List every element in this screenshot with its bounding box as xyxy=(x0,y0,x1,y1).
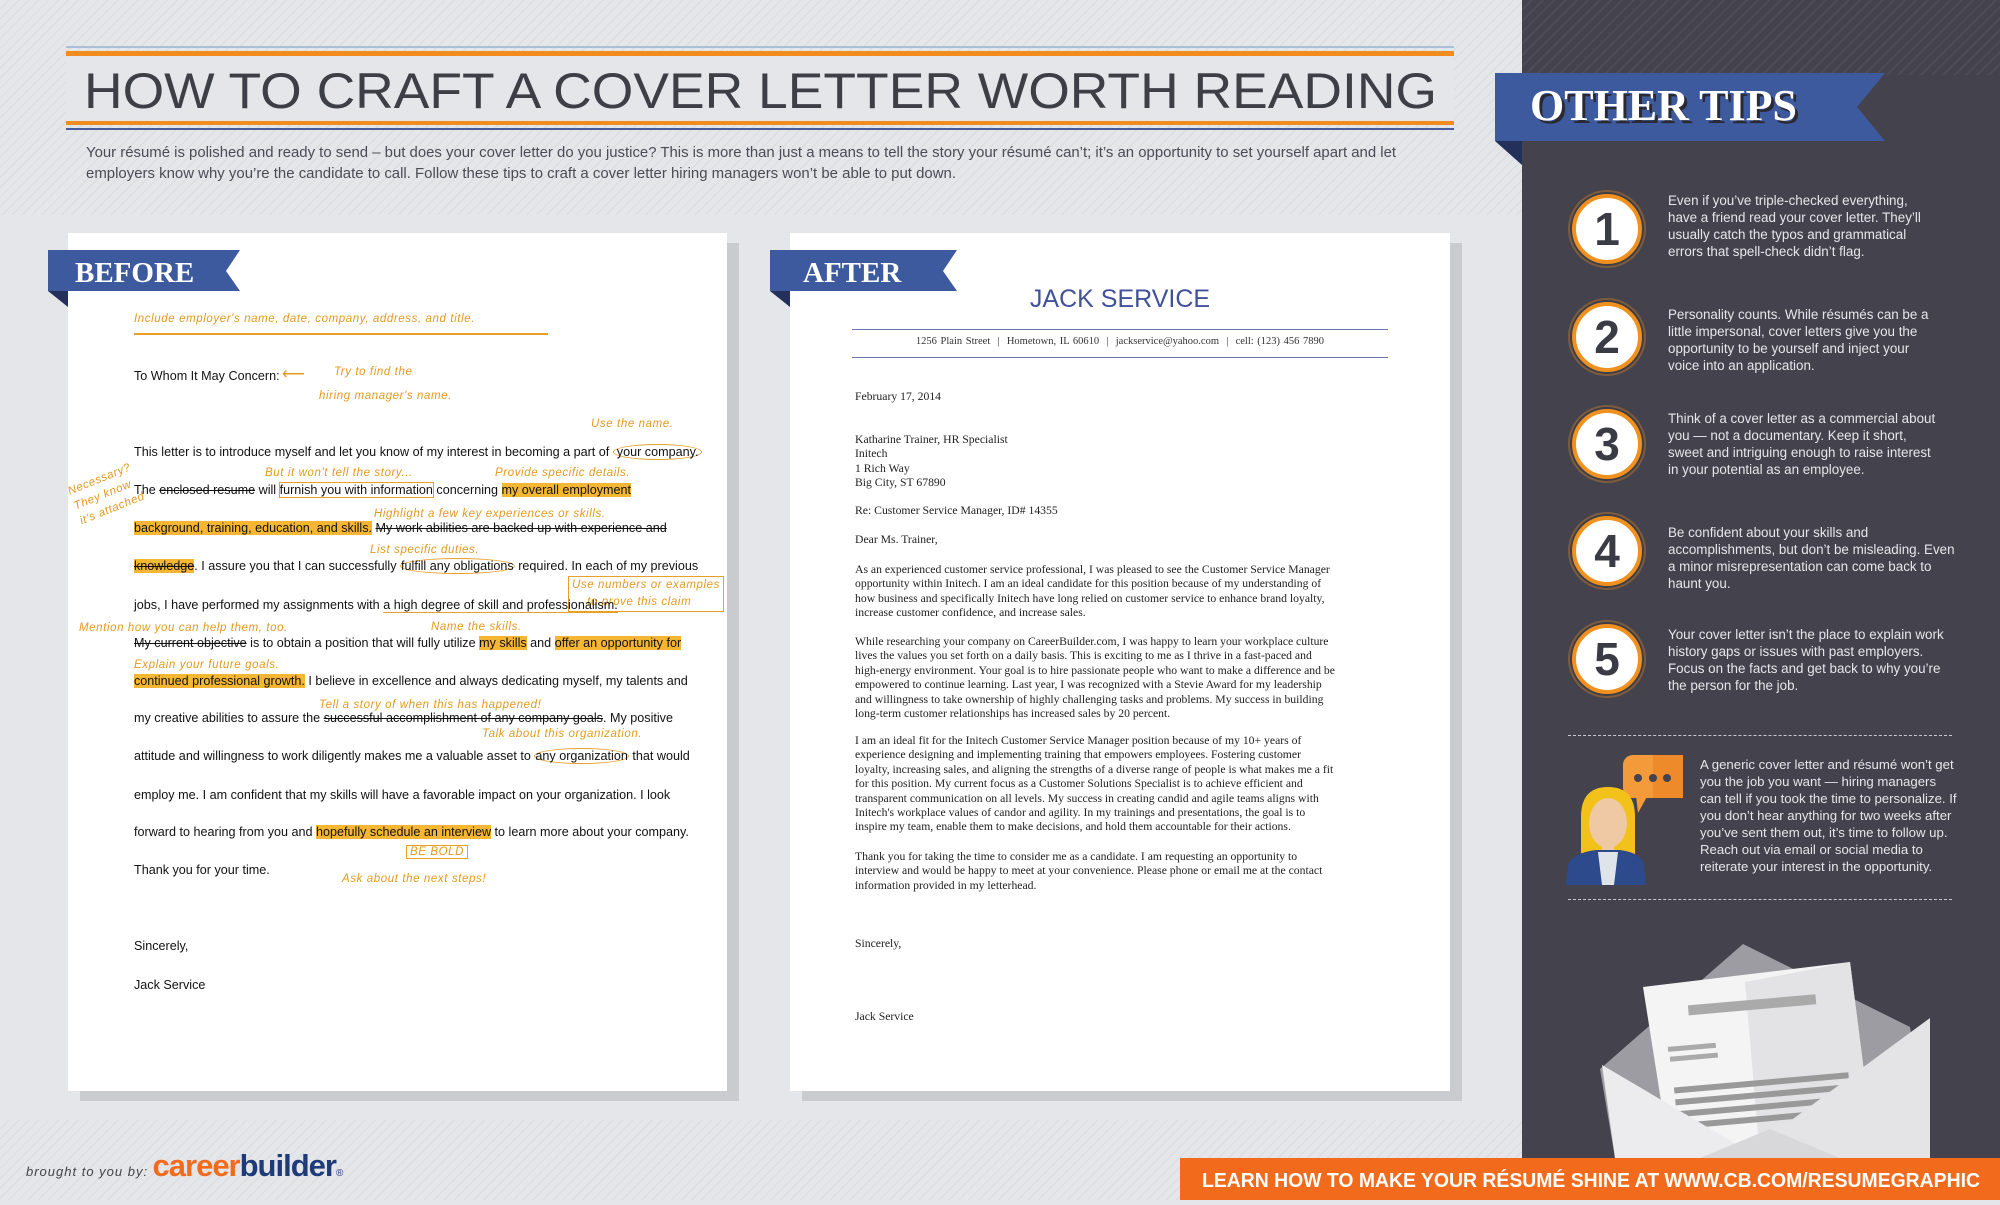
after letter content: for this position. My current focus as a Customer Solutions Specialist is to achieve efficient and xyxy=(855,777,1303,790)
after letter content: Re: Customer Service Manager, ID# 14355 xyxy=(855,504,1058,517)
panel: before letter xyxy=(68,233,727,1091)
footer bar: LEARN HOW TO MAKE YOUR RÉSUMÉ SHINE AT WWW.CB.COM/RESUMEGRAPHIC xyxy=(1202,1169,1980,1192)
before letter content: To Whom It May Concern: xyxy=(134,369,280,383)
panel: after letter xyxy=(790,233,1450,1091)
before letter content: Talk about this organization. xyxy=(482,728,642,740)
before letter content: The enclosed resume will furnish you with information concerning my overall employment xyxy=(134,483,631,497)
after letter content: JACK SERVICE xyxy=(1030,285,1210,313)
after letter content: inspire my team, enable them to make decisions, and hold them accountable for their actions. xyxy=(855,820,1291,833)
intro paragraph: employers know why you’re the candidate to call. Follow these tips to craft a cover letter hiring managers won’t be able to put down. xyxy=(86,165,956,182)
after letter content: Initech's workplace values of candor and agility. In my trainings and presentations, the goal is to xyxy=(855,806,1305,819)
after letter content: long-term customer relationships has increased sales by 20 percent. xyxy=(855,707,1170,720)
after letter content: opportunity within Initech. I am an ideal candidate for this position because of my understanding of xyxy=(855,577,1321,590)
after letter content: and willingness to take ownership of highly challenging tasks and problems. My success in building xyxy=(855,693,1323,706)
before letter content: Use numbers or examples xyxy=(572,579,720,591)
footer bar xyxy=(1180,1158,2000,1200)
after letter content: transparent communication on all levels. My success in creating candid and agile teams aligns with xyxy=(855,792,1319,805)
before letter content: Necessary? xyxy=(66,461,133,498)
before letter content: ⟵ xyxy=(282,366,306,383)
after letter content: 1256 Plain Street | Hometown, IL 60610 | jackservice@yahoo.com | cell: (123) 456 7890 xyxy=(916,336,1324,347)
after letter content: Sincerely, xyxy=(855,937,901,950)
tip 5: 5 xyxy=(1594,633,1620,685)
before letter content: This letter is to introduce myself and let you know of my interest in becoming a part of your company. xyxy=(134,445,698,459)
icon: woman with speech bubble xyxy=(1566,755,1683,885)
banner: other tips: OTHER TIPS xyxy=(1533,84,1800,133)
banner: after: AFTER xyxy=(803,257,902,289)
tip 1: Even if you’ve triple-checked everything, have a friend read your cover letter. They’ll usually catch the typos and grammatical errors that spell-check didn’t flag. xyxy=(1668,193,1921,259)
title block xyxy=(66,46,1454,130)
tip 2 xyxy=(1568,298,1928,376)
banner: before: BEFORE xyxy=(75,257,194,289)
after letter content: loyalty, increasing sales, and aligning the strengths of a diverse range of people is what makes me a fit xyxy=(855,763,1333,776)
before letter content: background, training, education, and skills. My work abilities are backed up with experience and xyxy=(134,521,667,535)
before letter content: Jack Service xyxy=(134,978,205,992)
before letter content: They know xyxy=(72,478,133,512)
tip 5 xyxy=(1568,620,1944,698)
banner: other tips: OTHER TIPS xyxy=(1530,81,1797,130)
intro paragraph xyxy=(86,144,1397,182)
icon: envelope with letter xyxy=(1600,944,1930,1158)
before letter content xyxy=(66,313,724,992)
after letter content: While researching your company on CareerBuilder.com, I was happy to learn your workplace culture xyxy=(855,635,1328,648)
before letter content: forward to hearing from you and hopefully schedule an interview to learn more about your company. xyxy=(134,825,689,839)
before letter content: it's attached xyxy=(78,490,147,527)
after letter content: Thank you for taking the time to consider me as a candidate. I am requesting an opportunity to xyxy=(855,850,1297,863)
after letter content: increase customer confidence, and increase sales. xyxy=(855,606,1086,619)
banner: other tips xyxy=(1495,73,1885,165)
before letter content: Include employer's name, date, company, address, and title. xyxy=(134,313,475,325)
after letter content: empowered to continue learning. Last year, I was recognized with a Stevie Award for my leadership xyxy=(855,678,1322,691)
after letter content: how business and specifically Initech have long relied on customer service to enhance brand loyalty, xyxy=(855,592,1325,605)
follow-up text: A generic cover letter and résumé won’t get you the job you want — hiring managers can tell if you took the time to personalize. If you don’t hear anything for two weeks after you’ve sent them out, it’s time to follow up. Reach out via email or social media to reiterate your interest in the opportunity. xyxy=(1700,757,1957,874)
before letter content: jobs, I have performed my assignments with a high degree of skill and professionalism. xyxy=(134,598,618,612)
logo: careerbuilder: brought to you by: careerbuilder® xyxy=(26,1148,343,1183)
tip 5: Your cover letter isn’t the place to explain work history gaps or issues with past employers. Focus on the facts and get back to why you’re the person for the job. xyxy=(1668,627,1944,693)
before letter content: Highlight a few key experiences or skills. xyxy=(374,508,606,520)
after letter content: Katharine Trainer, HR Specialist xyxy=(855,433,1008,446)
after letter content: February 17, 2014 xyxy=(855,390,941,403)
before letter content: continued professional growth. I believe in excellence and always dedicating myself, my talents and xyxy=(134,674,688,688)
before letter content: Try to find the xyxy=(334,366,412,378)
after letter content: interview and would be happy to meet at your convenience. Please phone or email me at the contact xyxy=(855,864,1322,877)
after letter content: Dear Ms. Trainer, xyxy=(855,533,938,546)
before letter content: Mention how you can help them, too. xyxy=(79,622,288,634)
before letter content: Use the name. xyxy=(591,418,674,430)
background stripes top xyxy=(0,0,1522,215)
before letter content: My current objective is to obtain a position that will fully utilize my skills and offer an opportunity for xyxy=(134,636,681,650)
after letter content: lives the values you set forth on a daily basis. This is exciting to me as I thrive in a fast-paced and xyxy=(855,649,1312,662)
tip 3: Think of a cover letter as a commercial about you — not a documentary. Keep it short, sweet and intriguing enough to raise interest in your potential as an employee. xyxy=(1668,411,1935,477)
panel: other tips xyxy=(1522,0,2000,1158)
intro paragraph: Your résumé is polished and ready to send – but does your cover letter do you justice? This is more than just a means to tell the story your résumé can’t; it’s an opportunity to set yourself apart and let xyxy=(86,144,1397,161)
before letter content: my creative abilities to assure the successful accomplishment of any company goals. My positive xyxy=(134,711,673,725)
tip 3: 3 xyxy=(1594,418,1620,470)
after letter content: information provided in my letterhead. xyxy=(855,879,1036,892)
follow-up callout xyxy=(1566,755,1957,885)
before letter content: hiring manager's name. xyxy=(319,390,452,402)
before letter content: to prove this claim xyxy=(587,596,691,608)
after letter content: high-energy environment. Your goal is to hire passionate people who want to make a difference and be xyxy=(855,664,1335,677)
tip 4: 4 xyxy=(1594,525,1620,577)
tip 4: Be confident about your skills and accomplishments, but don’t be misleading. Even a minor misrepresentation can come back to haunt you. xyxy=(1668,525,1955,591)
after letter content: 1 Rich Way xyxy=(855,462,910,475)
after letter content: Jack Service xyxy=(855,1010,914,1023)
before letter content: knowledge. I assure you that I can successfully fulfill any obligations required. In each of my previous xyxy=(134,559,698,573)
banner: before xyxy=(48,250,240,307)
tip 1 xyxy=(1568,190,1921,268)
before letter content: employ me. I am confident that my skills will have a favorable impact on your organization. I look xyxy=(134,788,670,802)
before letter content: Ask about the next steps! xyxy=(342,873,486,885)
tip 1: 1 xyxy=(1594,203,1620,255)
tip 2: Personality counts. While résumés can be a little impersonal, cover letters give you the opportunity to be yourself and inject your voice into an application. xyxy=(1668,307,1928,373)
banner: after xyxy=(770,250,957,307)
before letter content: List specific duties. xyxy=(370,544,479,556)
before letter content: Name the skills. xyxy=(431,621,522,633)
after letter content: Initech xyxy=(855,447,887,460)
before letter content: Thank you for your time. xyxy=(134,863,270,877)
tip 2: 2 xyxy=(1594,311,1620,363)
after letter content xyxy=(852,285,1388,1023)
tip 3 xyxy=(1568,405,1936,483)
before letter content: BE BOLD xyxy=(410,846,464,858)
tip 4 xyxy=(1568,512,1955,591)
after letter content: experience designing and implementing training that empowers employees. Fostering customer xyxy=(855,748,1301,761)
after letter content: I am an ideal fit for the Initech Customer Service Manager position because of my 10+ years of xyxy=(855,734,1301,747)
before letter content: Tell a story of when this has happened! xyxy=(319,699,541,711)
after letter content: Big City, ST 67890 xyxy=(855,476,946,489)
before letter content: But it won't tell the story... xyxy=(265,467,413,479)
before letter content: attitude and willingness to work diligently makes me a valuable asset to any organization that would xyxy=(134,749,690,763)
before letter content: Provide specific details. xyxy=(495,467,630,479)
after letter content: As an experienced customer service professional, I was pleased to see the Customer Service Manager xyxy=(855,563,1330,576)
title: HOW TO CRAFT A COVER LETTER WORTH READING xyxy=(84,63,1437,119)
before letter content: Sincerely, xyxy=(134,939,188,953)
before letter content: Explain your future goals. xyxy=(134,659,279,671)
